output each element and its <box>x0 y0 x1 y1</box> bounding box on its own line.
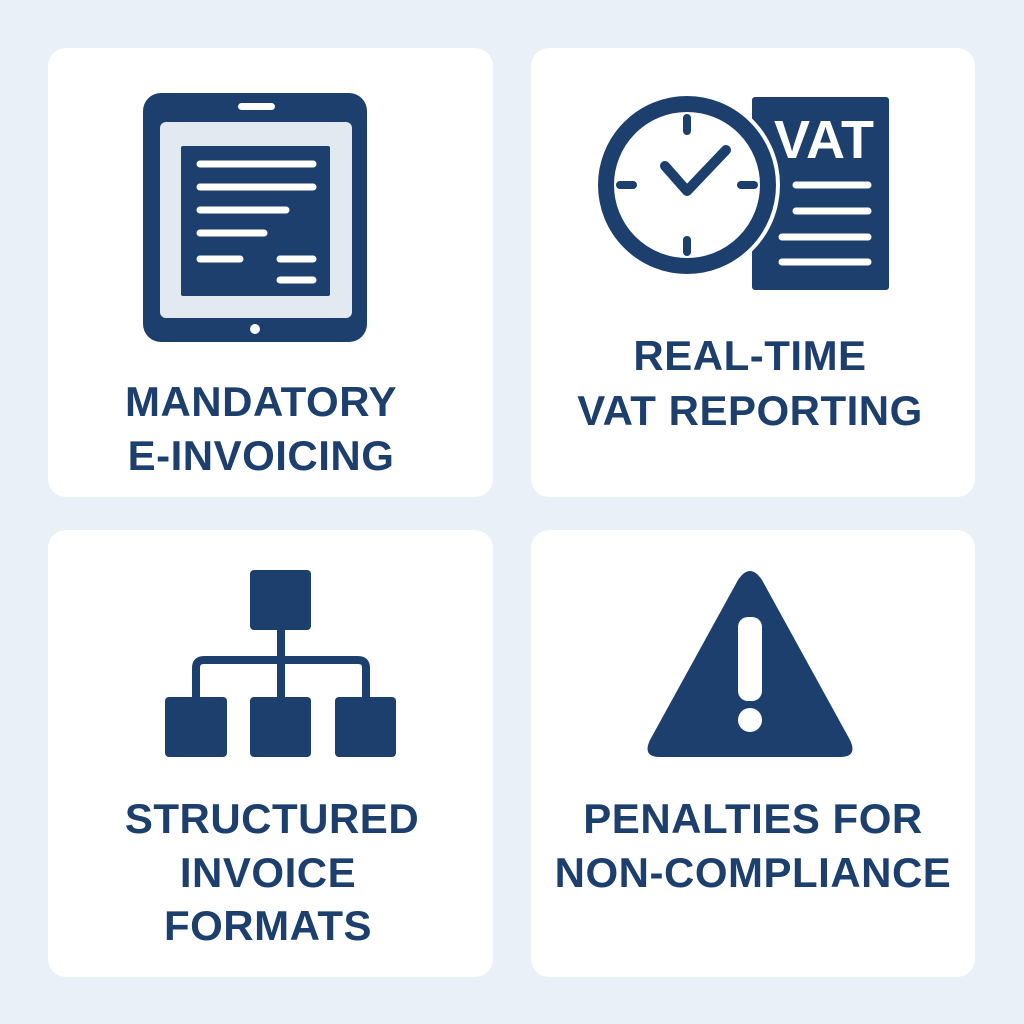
heading: penalties for non-compliance <box>555 795 951 896</box>
panel: structured invoice formats <box>48 530 493 977</box>
heading: structured invoice formats: FORMATS <box>164 902 372 949</box>
heading: mandatory e-invoicing: E-INVOICING <box>128 432 394 479</box>
icon: warning triangle <box>648 571 852 757</box>
heading: real-time vat reporting <box>577 332 923 434</box>
icon: clock and vat document: VAT <box>774 110 874 170</box>
heading: penalties for non-compliance: PENALTIES FOR <box>583 795 923 842</box>
icon: clock and vat document <box>594 92 889 290</box>
heading: structured invoice formats: STRUCTURED <box>125 795 419 842</box>
panel: penalties for non-compliance <box>531 530 975 977</box>
heading: mandatory e-invoicing: MANDATORY <box>125 378 397 425</box>
heading: mandatory e-invoicing <box>125 378 397 479</box>
heading: penalties for non-compliance: NON-COMPLIANCE <box>555 849 951 896</box>
panel: real-time vat reporting <box>531 48 975 497</box>
heading: real-time vat reporting: REAL-TIME <box>633 332 867 379</box>
heading: structured invoice formats <box>125 795 419 949</box>
icon: tablet <box>143 93 367 342</box>
panel: mandatory e-invoicing <box>48 48 493 497</box>
heading: real-time vat reporting: VAT REPORTING <box>577 387 923 434</box>
icon: hierarchy <box>165 570 396 757</box>
heading: structured invoice formats: INVOICE <box>180 849 356 896</box>
